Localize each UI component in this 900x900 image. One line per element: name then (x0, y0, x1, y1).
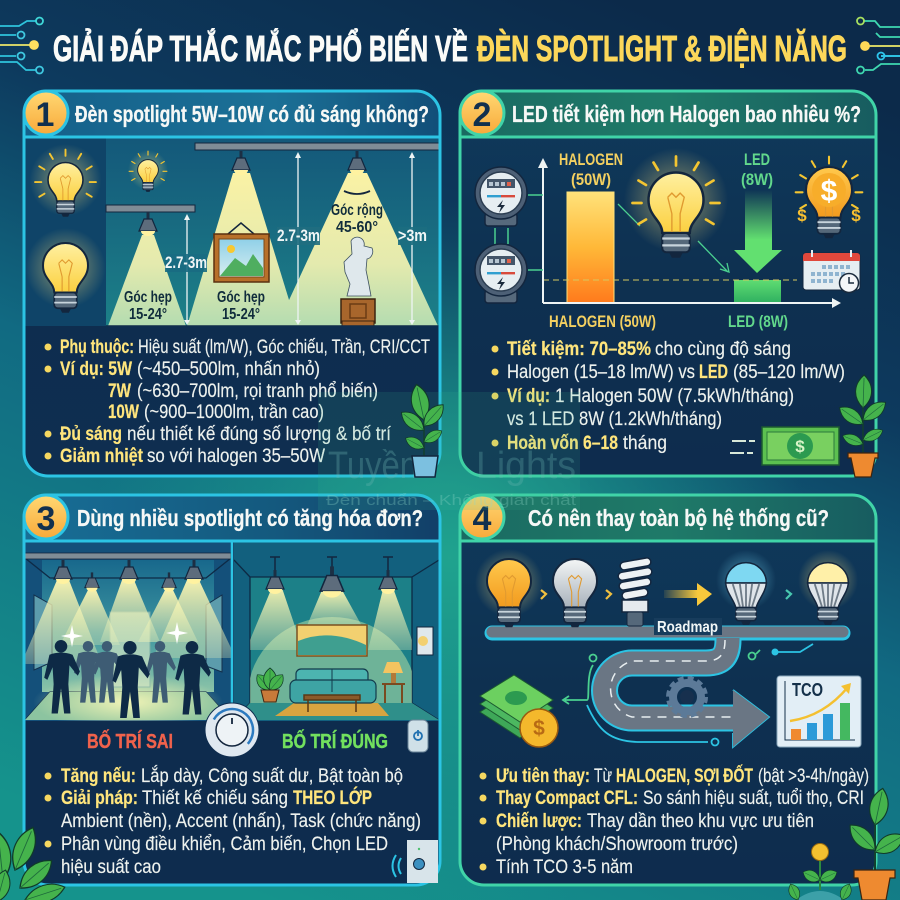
light cone: narrow centre (187, 173, 297, 326)
rug, table, sofa (275, 669, 389, 716)
panel 3 number badge: 3 (37, 500, 55, 538)
icon: wireless sensor (392, 840, 438, 883)
light cone: wide right (277, 173, 438, 326)
beam angle arc (344, 191, 370, 194)
chart labels: HALOGEN (50W) (549, 313, 656, 331)
chart labels: (8W) (741, 171, 773, 189)
watermark (318, 392, 580, 510)
panel 4 bullet text: Chiến lược: (496, 811, 582, 832)
panel 3 bullet text: Giải pháp: (61, 788, 138, 809)
panel 4 bullet text (480, 765, 869, 878)
panel 3 heading: Dùng nhiều spotlight có tăng hóa đơn? (77, 505, 423, 531)
icon: banknote (730, 427, 839, 465)
framed picture (214, 223, 269, 282)
height labels (165, 226, 427, 272)
chart labels (549, 151, 788, 331)
light cones (250, 585, 412, 650)
icon: power switch (408, 720, 428, 752)
roadmap track (492, 632, 843, 747)
panel 2 bullet text: Tiết kiệm: 70–85% (507, 339, 651, 360)
panel 2 background (460, 91, 876, 476)
height labels: 2.7-3m (277, 226, 320, 245)
icon: banknote: $ (795, 437, 805, 456)
spot lamps (54, 560, 203, 592)
halogen bulb (475, 549, 543, 627)
icon: bulbs progression (475, 549, 858, 627)
watermark: Đèn chuẩn – Không gian chất (326, 492, 577, 509)
panel 4 header (460, 495, 876, 541)
panel 2: LED vs Halogen (460, 91, 876, 476)
panel 1 bullet text (44, 337, 430, 467)
beam labels: Góc rộng (331, 202, 383, 219)
panel 2 bullet text: (85–120 lm/W) (733, 362, 845, 383)
beam labels (124, 202, 383, 323)
panel 1: spotlight 5W-10W (24, 91, 440, 476)
icon: money and coin (480, 675, 558, 747)
incandescent bulb (553, 559, 597, 627)
warm LED bulb (798, 550, 858, 625)
panel 1 number badge: 1 (36, 96, 54, 134)
label: wrong layout: BỐ TRÍ SAI (87, 729, 173, 753)
panel 3: many spotlights (24, 495, 440, 885)
panel 2 number badge (460, 91, 504, 135)
beam labels: Góc hẹp (217, 289, 265, 306)
panel 4 bullet text: (bật >3-4h/ngày) (758, 766, 869, 787)
LED bar (734, 280, 781, 303)
panel 3 bullet text: Ambient (nền), Accent (nhấn), Task (chức năng) (61, 811, 421, 832)
panel 1 bullet text: so với halogen 35–50W (147, 446, 325, 467)
panel 1 heading: Đèn spotlight 5W–10W có đủ sáng không? (75, 101, 429, 127)
roadmap label: Roadmap (657, 619, 718, 636)
panel 1 background (24, 91, 440, 476)
icon: electric meters (475, 167, 543, 303)
chart labels: (50W) (571, 171, 611, 189)
beam labels: Góc hẹp (124, 289, 172, 306)
panel 2 bullet text: tháng (623, 433, 667, 454)
panel 2 bullet text: Halogen (15–18 lm/W) vs (507, 362, 695, 383)
icon: calendar and clock (803, 250, 860, 292)
panel 3 border (24, 495, 440, 885)
panel 3 number badge (24, 495, 68, 539)
panel 1 scene illustration (24, 138, 440, 326)
icon: dimmer knob (203, 701, 261, 759)
panel 3 bullet text: Thiết kế chiếu sáng (142, 788, 288, 809)
icon: dollar bulb (796, 157, 862, 238)
panel 4 bullet text: Tính TCO 3-5 năm (496, 857, 633, 878)
icon: dollar bulb: $ (797, 206, 807, 225)
chart labels: LED (744, 151, 770, 169)
panel 4 bullet text: (Phòng khách/Showroom trước) (496, 834, 738, 855)
icon: circuit decoration right (857, 18, 900, 74)
panel 1 header (24, 91, 440, 137)
table lamp (382, 662, 405, 703)
watermark: Tuyền (328, 445, 418, 487)
beam labels: 45-60° (336, 219, 378, 236)
wall switch (417, 627, 433, 655)
chevrons (541, 590, 611, 599)
icon: glowing bulb large top (30, 144, 102, 217)
halogen bar (567, 192, 614, 303)
panel 4 bullet text: Thay Compact CFL: (496, 788, 638, 809)
beam labels: 15-24° (222, 306, 260, 323)
panel 2 bullet text: cho cùng độ sáng (655, 339, 791, 360)
icon: glowing bulb large bottom (26, 228, 106, 313)
silhouettes of people (44, 640, 211, 718)
title: GIẢI ĐÁP THẮC MẮC PHỔ BIẾN VỀ (53, 26, 468, 69)
panel 1 bullet text: Đủ sáng (60, 424, 122, 445)
chart labels: LED (8W) (728, 313, 788, 331)
icon: dollar bulb: $ (821, 175, 838, 208)
panel 1 bullet text: (~630–700lm, rọi tranh phổ biến) (137, 381, 378, 402)
panel 3 bullet text: hiệu suất cao (61, 857, 161, 878)
height arrows (184, 152, 415, 325)
panel 3 bullet text: THEO LỚP (293, 787, 372, 809)
icon: main bulb (624, 148, 728, 258)
light cones (25, 580, 231, 664)
height labels: >3m (398, 226, 427, 245)
panel 2 bullet text: 1 Halogen 50W (7.5kWh/tháng) (555, 386, 794, 407)
panel 3 bullet text: Phân vùng điều khiển, Cảm biến, Chọn LED (61, 834, 388, 855)
beam labels: 15-24° (129, 306, 167, 323)
icon: plant bottom left (0, 824, 67, 900)
chart axes (543, 162, 838, 303)
panel 3 bullet text: Tăng nếu: (61, 766, 136, 787)
panel 1 bullet text: (~900–1000lm, trần cao) (144, 402, 324, 423)
light cone: narrow left (108, 235, 186, 326)
panel 4 bullet text: Từ (594, 766, 612, 787)
panel 4 bullet text: Ưu tiên thay: (496, 766, 590, 787)
panel 1 bullet text: 7W (108, 381, 131, 402)
spot lamps (139, 151, 366, 236)
CFL bulb (618, 557, 652, 626)
panel 4 border (460, 495, 876, 885)
icon: coin sprout (786, 844, 854, 900)
panel 1 bullet text: Giảm nhiệt (60, 446, 144, 467)
panel 3 bullet text: Lắp dày, Công suất dư, Bật toàn bộ (141, 765, 403, 787)
icon: plant orange pot (836, 375, 890, 477)
panel 2 header (460, 91, 876, 137)
panel 1 number badge (24, 91, 68, 135)
panel 4 number badge (460, 495, 504, 539)
panel 4 bullet text: HALOGEN, SỢI ĐỐT (616, 765, 753, 787)
pendant lamps (266, 557, 397, 598)
icon: dollar bulb: $ (851, 206, 861, 225)
icon: TCO chart (777, 676, 861, 747)
panel 3 header (24, 495, 440, 541)
scene: right layout (234, 542, 438, 721)
panel 2 bullet text: Ví dụ: (507, 386, 550, 407)
panel 2 bullet text (492, 339, 845, 454)
glare stars (61, 622, 188, 647)
panel 2 bullet text: vs 1 LED 8W (1.2kWh/tháng) (507, 409, 722, 430)
icon: TCO chart: TCO (792, 680, 823, 700)
potted plant (256, 668, 284, 702)
panel 3 background (24, 495, 440, 885)
panel 4 background (460, 495, 876, 885)
panel 1 border (24, 91, 440, 476)
blue LED bulb (716, 550, 776, 625)
panel 4: replace old system (460, 495, 876, 885)
thin connector arrows (618, 204, 729, 272)
icon: money and coin: $ (533, 717, 545, 740)
panel 2 bullet text: Hoàn vốn 6–18 (507, 433, 618, 454)
panel 4 number badge: 4 (473, 500, 492, 538)
panel 1 bullet text: 10W (108, 402, 139, 423)
icon: gear (668, 678, 706, 716)
panel 4 heading: Có nên thay toàn bộ hệ thống cũ? (528, 505, 829, 531)
height labels: 2.7-3m (165, 253, 207, 272)
panel 1 bullet text: Phụ thuộc: (60, 337, 134, 358)
wall painting (297, 625, 367, 656)
panel 2 bullet text: LED (699, 362, 728, 383)
icon: small bulb (128, 150, 168, 192)
icon: plant bottom right (844, 787, 900, 900)
icon: circuit decoration left (0, 18, 43, 74)
bar chart: halogen vs LED (538, 151, 841, 331)
icon: plant blue pot (397, 383, 448, 477)
scene: wrong layout (25, 541, 231, 730)
watermark: Lights (476, 445, 576, 487)
panel 2 number badge: 2 (473, 96, 491, 134)
panel 1 bullet text: (~450–500lm, nhấn nhỏ) (137, 359, 320, 380)
panel 1 bullet text: Ví dụ: 5W (60, 359, 132, 380)
chart labels: HALOGEN (559, 151, 623, 169)
progress arrow (664, 583, 712, 606)
down arrow to LED (734, 190, 782, 273)
statue (341, 237, 375, 326)
panel 3 bullet text (44, 765, 421, 878)
panel 2 border (460, 91, 876, 476)
label: correct layout: BỐ TRÍ ĐÚNG (282, 729, 388, 753)
panel 4 bullet text: Thay dần theo khu vực ưu tiên (587, 811, 814, 832)
panel 1 bullet text: Hiệu suất (lm/W), Góc chiếu, Trần, CRI/CCT (138, 337, 430, 358)
panel 1 bullet text: nếu thiết kế đúng số lượng & bố trí (127, 424, 392, 445)
ceiling bars (106, 143, 439, 212)
